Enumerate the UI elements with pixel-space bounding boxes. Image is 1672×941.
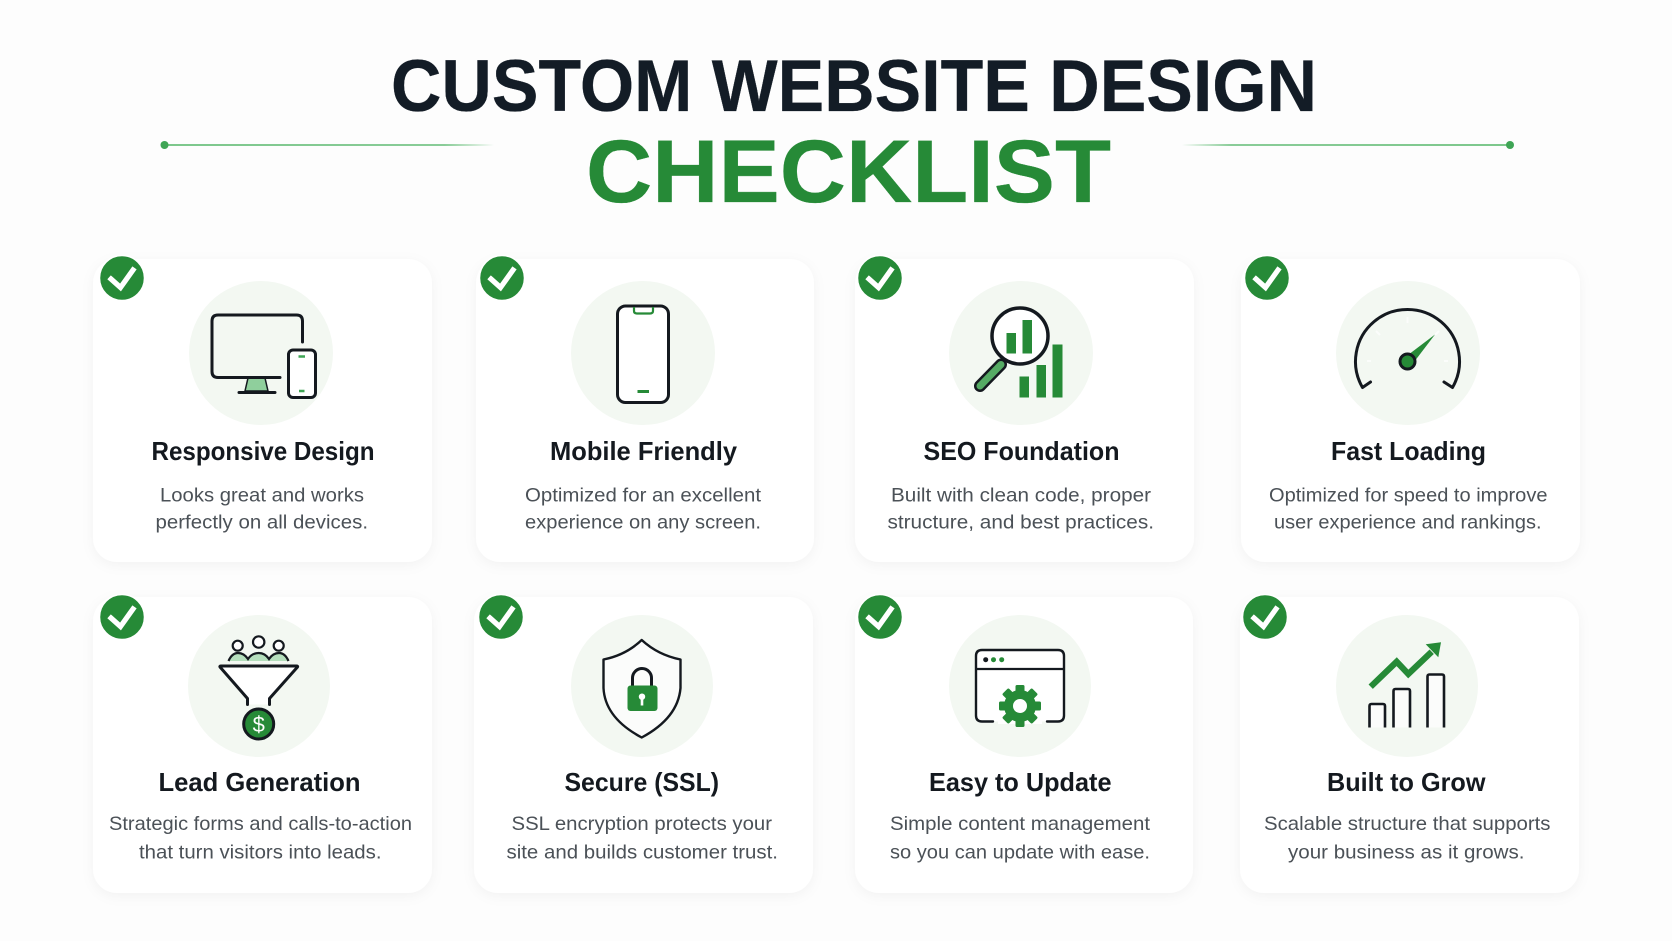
text: mobile description: Optimized for an excellent — [525, 484, 762, 506]
icon: check badge — [858, 256, 902, 300]
icon: check badge — [858, 594, 902, 640]
panel: responsive design — [93, 256, 432, 562]
text: lead generation description: that turn visitors into leads. — [139, 842, 382, 864]
heading: responsive design: Responsive Design — [152, 436, 374, 466]
text: seo description — [888, 484, 1154, 534]
text: built to grow description: your business as it grows. — [1288, 842, 1524, 864]
heading: fast loading: Fast Loading — [1331, 436, 1486, 466]
panel: easy to update — [855, 594, 1193, 893]
panel: built to grow — [1240, 594, 1579, 893]
text: lead generation description: Strategic forms and calls-to-action — [109, 813, 412, 835]
text: fast loading description — [1269, 484, 1548, 534]
heading: secure ssl: Secure (SSL) — [564, 767, 719, 797]
text: easy to update description: Simple content management — [890, 813, 1151, 835]
icon: check badge — [100, 594, 144, 640]
icon: check badge — [1244, 256, 1290, 300]
text: seo description: Built with clean code, proper — [891, 484, 1152, 506]
icon: browser window with gear — [949, 615, 1091, 757]
icon: magnifier and bars — [949, 281, 1093, 425]
heading: custom website design: CUSTOM WEBSITE DESIGN — [391, 46, 1317, 127]
icon: growth chart — [1336, 615, 1478, 757]
icon: check badge — [100, 256, 144, 300]
icon: check badge — [480, 256, 524, 300]
icon: shield with lock — [571, 615, 713, 757]
heading: lead generation: Lead Generation — [158, 767, 360, 797]
icon: check badge — [478, 594, 524, 640]
right title rule — [1182, 141, 1514, 149]
icon: speedometer — [1336, 281, 1480, 425]
text: easy to update description — [890, 813, 1151, 864]
panel: lead generation — [93, 594, 432, 893]
text: mobile description — [525, 484, 762, 534]
text: secure description — [506, 813, 778, 864]
text: responsive description: perfectly on all devices. — [156, 512, 368, 534]
panel: mobile friendly — [476, 256, 814, 562]
heading: checklist: CHECKLIST — [586, 121, 1111, 221]
text: built to grow description: Scalable structure that supports — [1264, 813, 1551, 835]
panel: fast loading — [1241, 256, 1580, 562]
heading: easy to update: Easy to Update — [929, 767, 1112, 797]
heading: seo foundation: SEO Foundation — [924, 436, 1120, 466]
icon: lead funnel: $ — [253, 712, 265, 737]
text: mobile description: experience on any screen. — [525, 512, 761, 534]
text: responsive description — [156, 484, 368, 534]
text: easy to update description: so you can update with ease. — [890, 842, 1150, 864]
icon: lead funnel — [188, 615, 330, 757]
icon: check badge — [1242, 594, 1288, 640]
icon: smartphone — [571, 281, 715, 425]
panel: secure ssl — [474, 594, 813, 893]
text: built to grow description — [1264, 813, 1551, 864]
icon: monitor and phone — [189, 281, 333, 425]
heading: mobile friendly: Mobile Friendly — [550, 436, 738, 466]
text: fast loading description: Optimized for speed to improve — [1269, 484, 1548, 506]
text: responsive description: Looks great and works — [160, 484, 364, 506]
panel: seo foundation — [855, 256, 1194, 562]
text: secure description: site and builds customer trust. — [506, 842, 778, 864]
text: secure description: SSL encryption protects your — [512, 813, 773, 835]
title — [391, 46, 1317, 221]
left title rule — [160, 141, 494, 149]
heading: built to grow: Built to Grow — [1327, 767, 1486, 797]
text: seo description: structure, and best practices. — [888, 512, 1154, 534]
text: fast loading description: user experience and rankings. — [1274, 512, 1542, 534]
text: lead generation description — [109, 813, 412, 864]
